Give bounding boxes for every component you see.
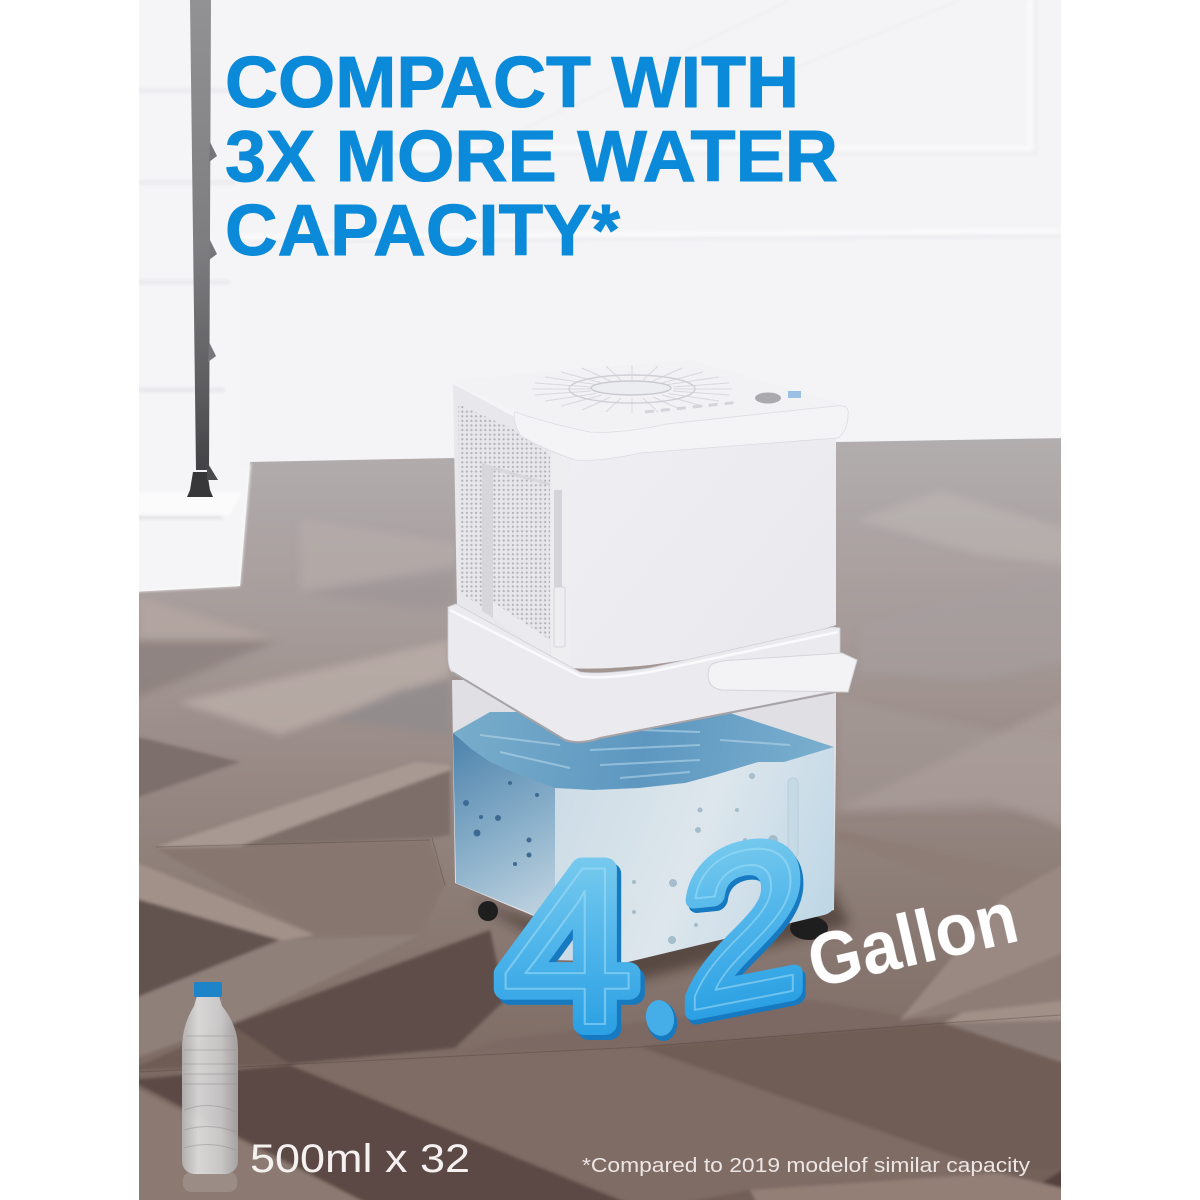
tank window gauge bbox=[788, 778, 798, 858]
footnote: *Compared to 2019 modelof similar capacity bbox=[582, 1155, 1030, 1177]
perforated left side bbox=[458, 404, 550, 640]
digit 4: 4 bbox=[500, 819, 636, 1072]
water bubbles bbox=[463, 781, 539, 866]
water surface bbox=[453, 712, 834, 790]
floor shadow bbox=[470, 885, 850, 985]
recessed filter slot bbox=[482, 463, 550, 658]
lower floor planks bbox=[130, 735, 1070, 1200]
4.2 acrylic number bbox=[500, 794, 807, 1077]
fan grille bbox=[532, 365, 732, 413]
digit 2: 2 bbox=[687, 799, 807, 1062]
title heading: 3X MORE WATER bbox=[225, 117, 838, 197]
plank seams bbox=[139, 838, 1061, 1072]
digit 2: 2 bbox=[684, 795, 804, 1058]
Gallon label: Gallon bbox=[800, 875, 1025, 1004]
upper floor planks bbox=[130, 490, 1070, 830]
floor bbox=[130, 438, 1070, 1200]
stair railing bbox=[187, 0, 218, 497]
digit 4: 4 bbox=[504, 824, 640, 1077]
bottle body bbox=[182, 996, 238, 1174]
tray band bbox=[448, 604, 840, 742]
decimal point bbox=[643, 998, 680, 1043]
digit 2: 2 bbox=[684, 795, 804, 1058]
title heading: CAPACITY* bbox=[225, 191, 620, 271]
tray inner rim highlight bbox=[450, 610, 838, 677]
staircase bbox=[139, 282, 252, 594]
side strip and slot bbox=[551, 452, 570, 668]
title heading bbox=[225, 43, 838, 271]
product: dehumidifier bbox=[448, 360, 857, 985]
infographic canvas bbox=[139, 0, 1061, 1200]
control panel buttons bbox=[645, 402, 740, 412]
title heading: COMPACT WITH bbox=[225, 43, 799, 123]
left side shell bbox=[453, 384, 570, 668]
decimal point: . bbox=[652, 1000, 660, 1033]
photo scene: room background bbox=[130, 0, 1070, 1200]
bottle reflection bbox=[183, 1172, 237, 1192]
water tank bbox=[452, 680, 836, 963]
tray handle bbox=[708, 653, 857, 692]
ripples bbox=[480, 730, 790, 778]
control dial bbox=[755, 392, 781, 404]
digit 4: 4 bbox=[500, 819, 636, 1072]
tray bottom shadow edge bbox=[452, 672, 836, 742]
upper body front face bbox=[570, 436, 836, 669]
water front face bbox=[555, 747, 834, 963]
water left face bbox=[453, 733, 624, 962]
bottle ridges bbox=[183, 1036, 237, 1150]
bottle cap bbox=[194, 982, 222, 997]
lid lip band bbox=[514, 406, 848, 460]
wall bbox=[242, 0, 1061, 466]
icon: water bottle bbox=[182, 982, 238, 1192]
caster wheels bbox=[478, 901, 828, 940]
wifi label bbox=[788, 391, 801, 398]
bottle count label: 500ml x 32 bbox=[250, 1137, 470, 1181]
lid top surface bbox=[453, 360, 837, 430]
